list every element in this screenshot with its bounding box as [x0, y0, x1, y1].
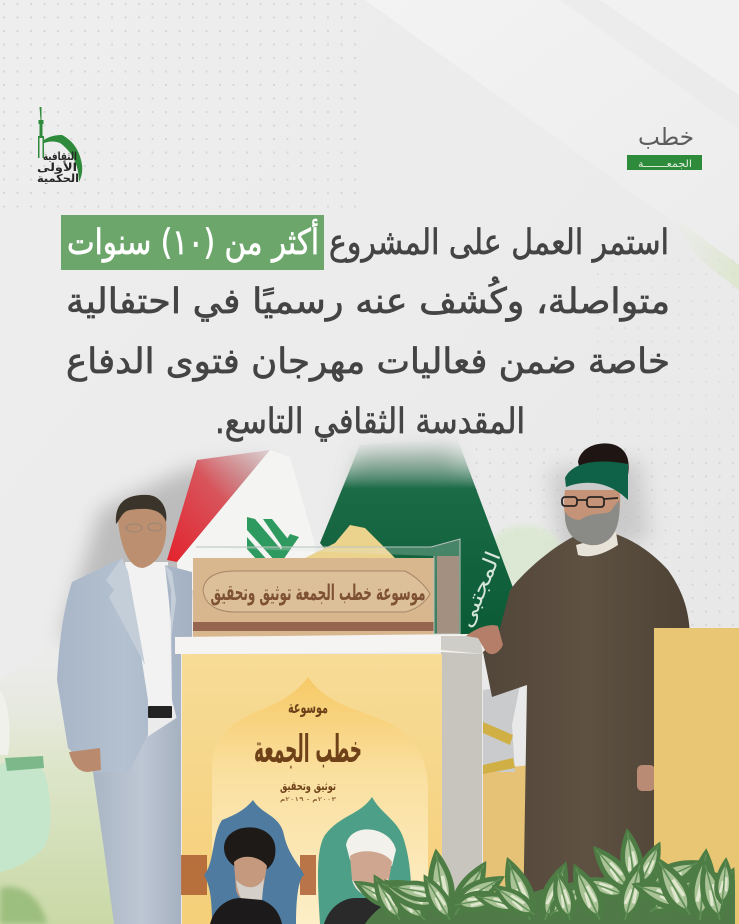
hand [69, 748, 101, 772]
beard [565, 500, 619, 545]
header label: Friday sermons [627, 123, 702, 170]
medallion [203, 571, 430, 612]
pale green figure at left [0, 690, 51, 924]
green label bar [627, 155, 702, 170]
poster [182, 654, 442, 924]
line 4: المقدسة الثقافي التاسع. [215, 402, 525, 442]
word: aljumaa: الجمعـــــــة [638, 159, 692, 170]
line 2: متواصلة، وكُشف عنه رسميًا في احتفالية [66, 276, 670, 322]
belt [148, 706, 172, 718]
pattern strip [181, 855, 316, 895]
hand at side [637, 765, 655, 791]
mawsouat: موسوعة [288, 698, 328, 718]
icon: dome [44, 135, 82, 182]
podium [175, 634, 483, 924]
right wooden lectern [654, 628, 739, 924]
headline text [66, 219, 670, 442]
shirt [125, 562, 172, 715]
Iraqi flag [167, 450, 316, 590]
white stripe [177, 450, 316, 590]
box title: موسوعة خطب الجمعة توثيق وتحقيق [210, 581, 426, 606]
red stripe [167, 450, 270, 562]
wooden box [193, 539, 460, 637]
neck and face [118, 501, 166, 568]
right portrait [318, 797, 412, 924]
word: khutab: خطب [638, 123, 694, 151]
man in grey suit [57, 495, 192, 924]
fabric under sleeve [483, 685, 520, 774]
line 1 highlighted: أكثر من (١٠) سنوات [67, 219, 319, 263]
podium: خطب الجمعة [254, 727, 362, 771]
pale green glow beside right figure [487, 525, 563, 585]
podium top [175, 634, 483, 654]
poster arch [212, 677, 428, 924]
collar [576, 532, 618, 556]
flag calligraphy: المجتبى [453, 548, 506, 631]
band [193, 622, 434, 631]
wooden stand behind [483, 765, 530, 924]
jacket [57, 558, 192, 773]
trousers [93, 715, 181, 924]
logo calligraphy: الثقافية [43, 150, 77, 163]
hand on podium [466, 625, 503, 654]
logo calligraphy: الحكمية [37, 172, 79, 185]
robe [483, 530, 690, 924]
lapels [106, 558, 176, 665]
green emblem [247, 517, 299, 562]
logo [37, 107, 82, 185]
hat [578, 443, 629, 475]
glasses [562, 497, 618, 507]
line 3: خاصة ضمن فعاليات مهرجان فتوى الدفاع [66, 342, 670, 382]
highlight box [61, 215, 324, 270]
logo calligraphy [37, 150, 79, 185]
plants [349, 826, 739, 924]
left portrait [204, 800, 304, 924]
logo calligraphy: الأولى [37, 160, 77, 174]
box side [437, 556, 459, 634]
hair [116, 495, 166, 524]
robed man with green turban [466, 443, 690, 924]
poster title [254, 698, 362, 803]
line 1 dark: استمر العمل على المشروع [329, 223, 669, 263]
soft shadows behind figures [60, 450, 650, 640]
subtitle: توثيق وتحقيق [280, 779, 336, 794]
face [564, 490, 620, 545]
yellow peak behind box [305, 525, 395, 558]
icon: minaret [38, 107, 44, 158]
turban [565, 462, 628, 500]
date line: ٢٠٠٣م - ٢٠١٩م [280, 796, 337, 803]
glass case [196, 539, 460, 634]
podium side [441, 652, 482, 924]
plant base foliage [365, 868, 735, 924]
glasses [126, 523, 162, 532]
green flag [320, 438, 515, 640]
